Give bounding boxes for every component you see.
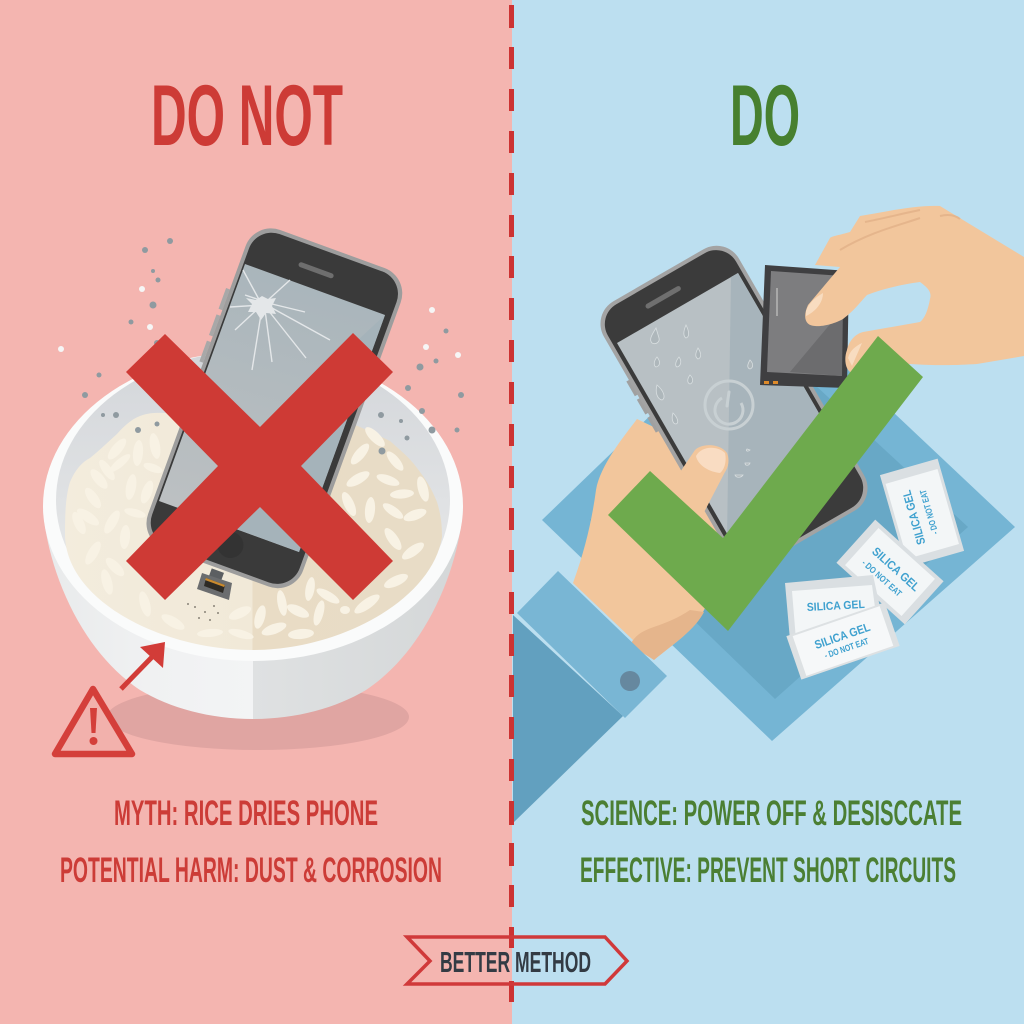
silica gel packet: front: - DO NOT EAT [823, 636, 870, 660]
dust particles [58, 238, 464, 454]
bowl rim [43, 351, 463, 661]
green check mark [608, 336, 923, 631]
port debris [187, 603, 219, 621]
silica gel packet: right [880, 459, 964, 567]
icon: power symbol [705, 381, 753, 429]
banner: better method [407, 937, 627, 984]
water droplets [651, 325, 753, 477]
bowl interior [56, 351, 450, 649]
hand: upper holding battery [805, 206, 1024, 372]
silica gel packet: back left: SILICA GEL [807, 599, 865, 614]
phone: cracked screen [135, 219, 410, 600]
phone body [588, 236, 877, 577]
sleeve cuff [517, 571, 667, 718]
heading: do not: DO NOT [151, 68, 343, 164]
icon: warning triangle [55, 689, 132, 754]
illustration: drying phone with silica gel [513, 206, 1024, 823]
bowl shadow [107, 684, 409, 750]
silica gel packet: middle: - DO NOT EAT [860, 558, 904, 599]
crack centre [246, 296, 276, 320]
silica gel packet: front: SILICA GEL [813, 620, 872, 652]
screen [159, 264, 385, 552]
banner: better method: BETTER METHOD [440, 947, 591, 979]
phone: wet screen [588, 236, 877, 577]
thumbnail [696, 448, 726, 473]
rice mound [65, 413, 442, 650]
rice grains [69, 424, 431, 641]
hand: lower holding phone [573, 419, 740, 660]
screen [617, 273, 850, 537]
sleeve [513, 615, 623, 823]
silica gel packet: middle [836, 520, 944, 624]
silica gel packet: right: SILICA GEL [899, 489, 928, 546]
phone body [135, 219, 410, 596]
panel: do not background [0, 0, 512, 1024]
text: potential harm: POTENTIAL HARM: DUST & CORROSION [60, 851, 442, 890]
panel: do background [512, 0, 1024, 1024]
cuff button [620, 671, 640, 691]
charging port connector [197, 568, 232, 600]
screen shade [195, 315, 385, 552]
silica gel packet: back left [785, 575, 885, 640]
screen crack [230, 270, 330, 370]
blue mat [542, 298, 1015, 741]
illustration: phone in rice bowl [43, 219, 464, 750]
silica gel packet: right: - DO NOT EAT [918, 488, 940, 536]
heading: do: DO [730, 68, 800, 164]
dashed divider [509, 5, 514, 1002]
text: myth: MYTH: RICE DRIES PHONE [114, 794, 378, 833]
red x mark [126, 333, 393, 600]
arrow: points to bowl [121, 642, 165, 689]
bowl body [43, 510, 463, 719]
screen shade [727, 273, 850, 538]
palm shadow [630, 610, 704, 660]
inner mat shade [590, 345, 968, 699]
battery [760, 265, 849, 388]
silica gel packet: front [786, 602, 900, 680]
silica gel packet: middle: SILICA GEL [869, 544, 922, 594]
thumb: lower hand [665, 445, 728, 520]
